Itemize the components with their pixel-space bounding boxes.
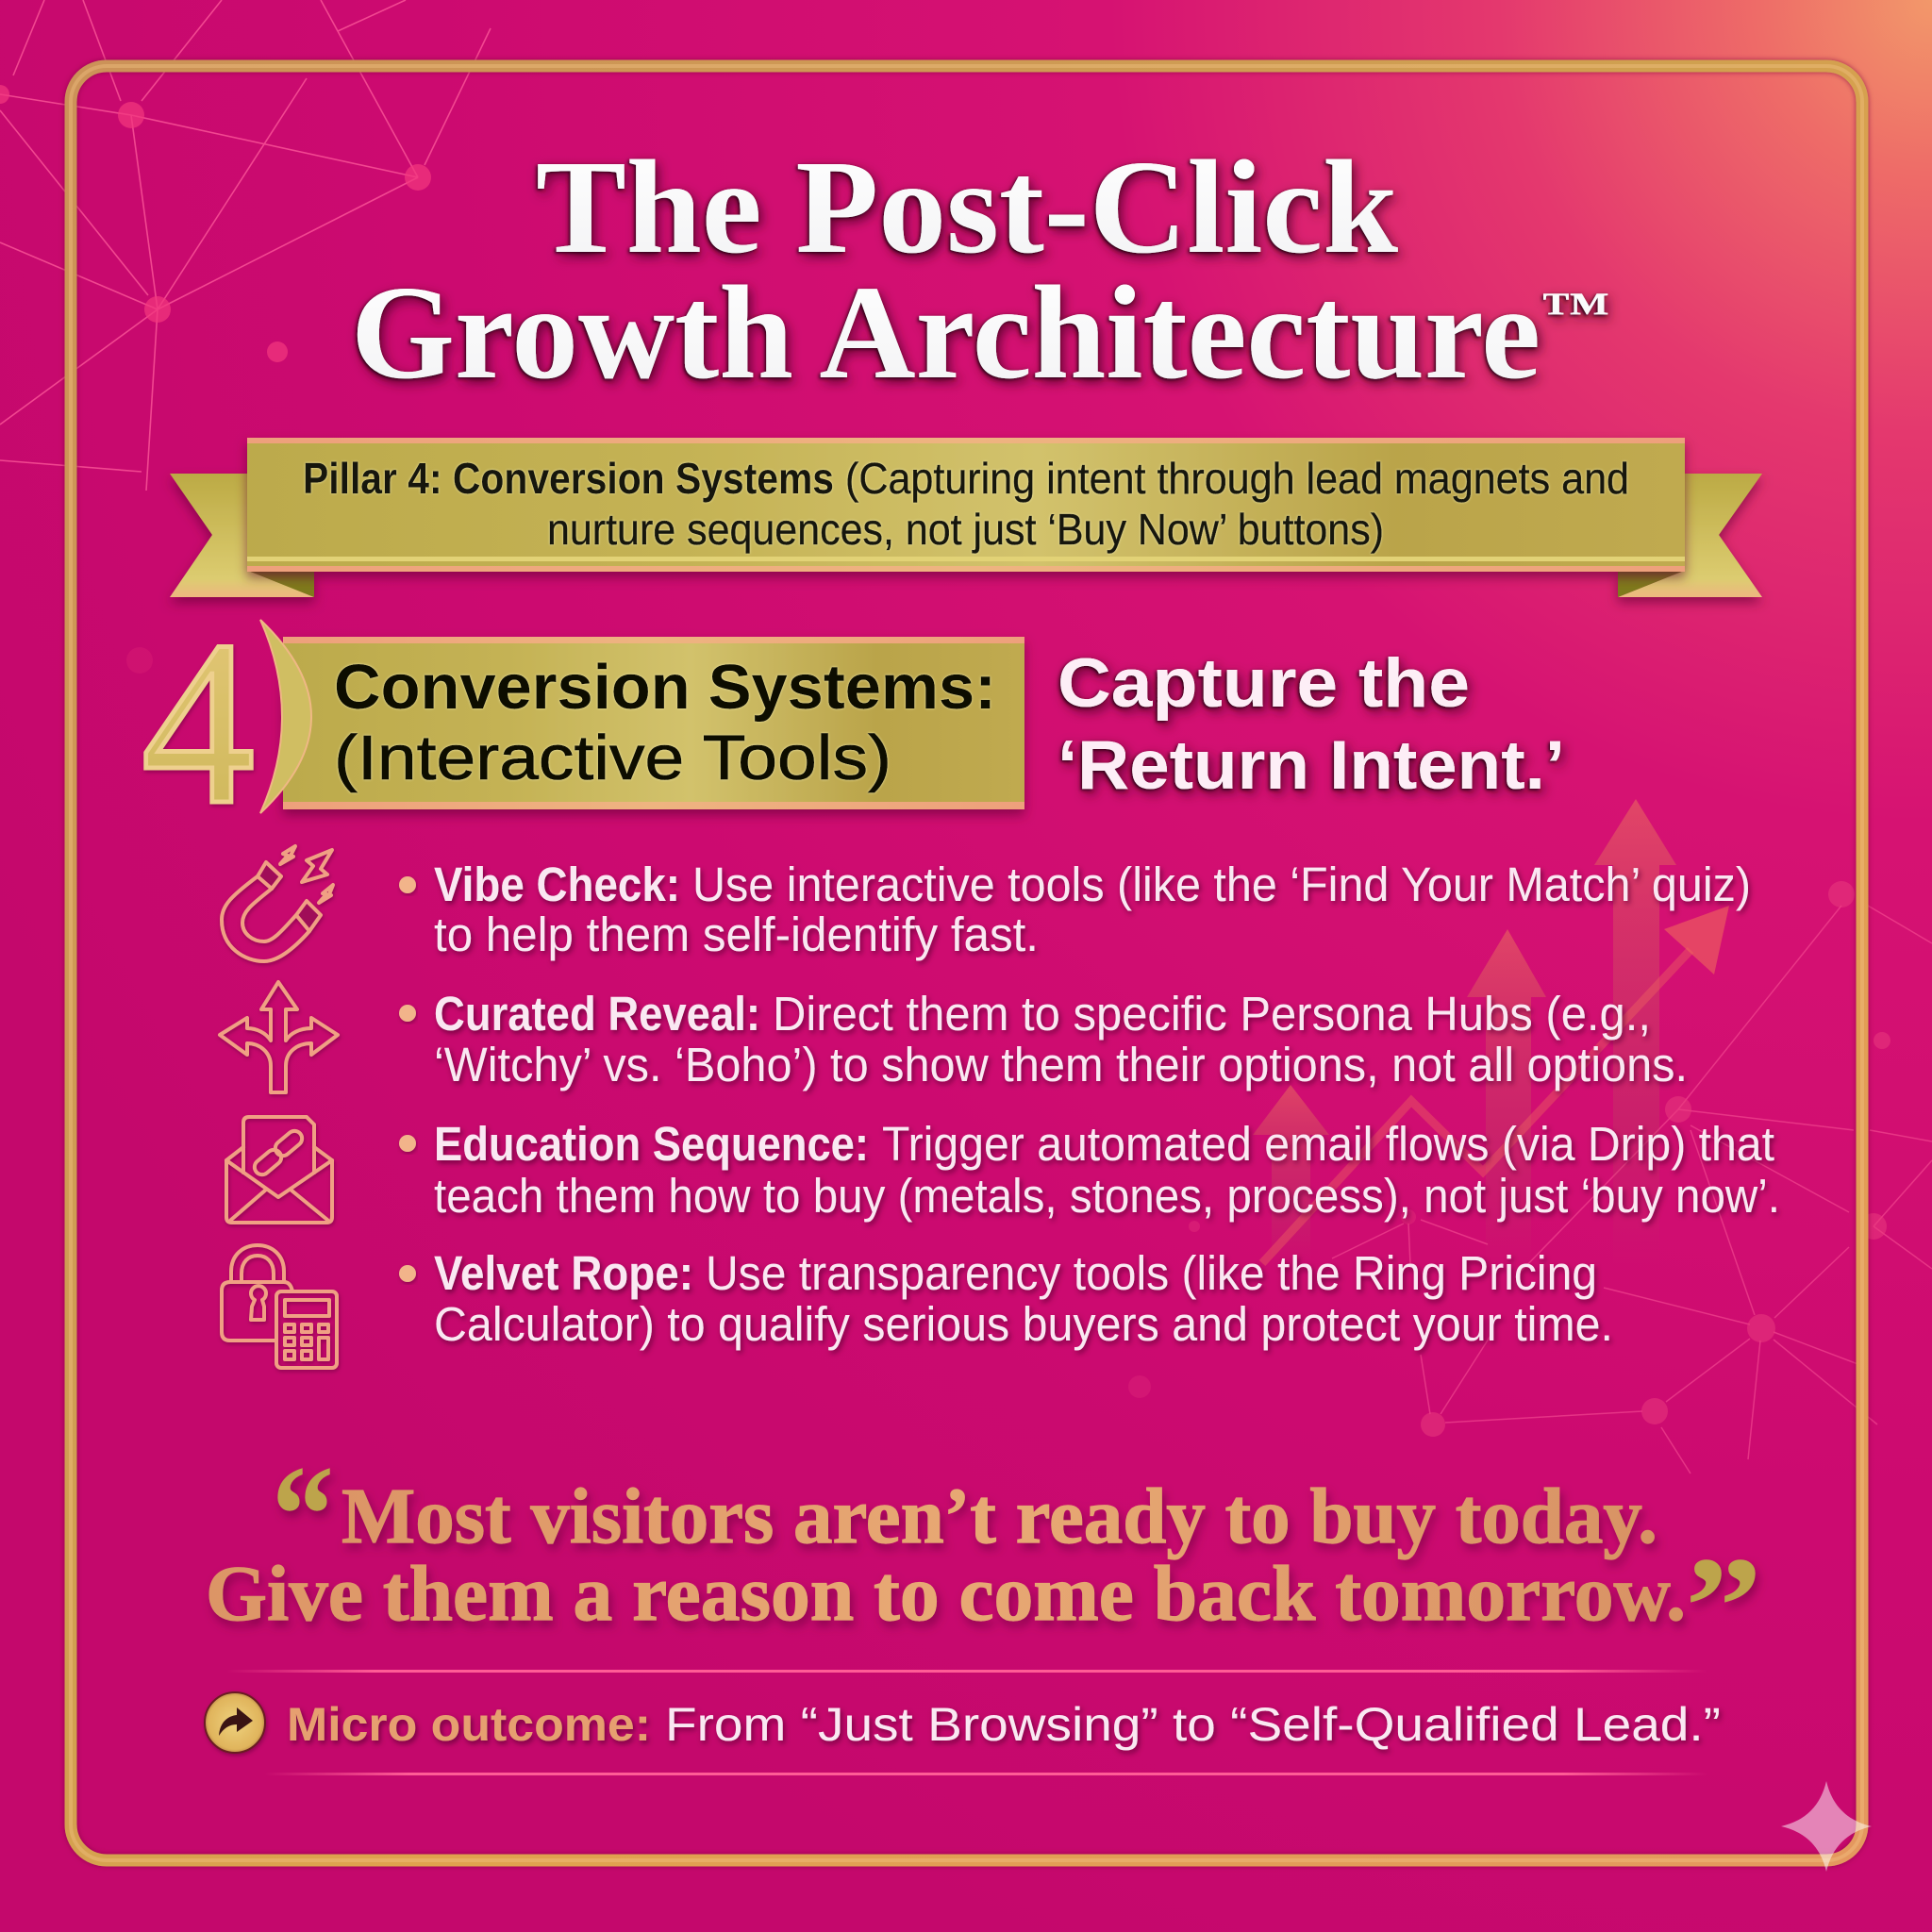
- bullet: Curated Reveal: [399, 987, 1688, 1091]
- divider top: [226, 1670, 1707, 1673]
- bullet: Education Sequence: teach them how to buy (metals, stones, process), not just ‘buy now’.: [434, 1169, 1780, 1223]
- title: [351, 132, 1610, 407]
- ribbon body: [247, 438, 1685, 572]
- divider bottom: [264, 1773, 1707, 1775]
- bullet: Curated Reveal: Direct them to specific Persona Hubs (e.g.,: [773, 987, 1651, 1041]
- bullet: Education Sequence: Trigger automated email flows (via Drip) that: [882, 1117, 1774, 1171]
- bullet: Curated Reveal: Curated Reveal:: [434, 987, 760, 1041]
- micro outcome: [205, 1692, 1721, 1753]
- pull quote: Most visitors aren’t ready to buy today.: [341, 1473, 1657, 1560]
- subheading: Capture the: [1058, 645, 1470, 722]
- title: ™: [1541, 282, 1610, 341]
- icon: email with link: [226, 1117, 332, 1223]
- micro outcome text: From “Just Browsing” to “Self-Qualified Lead.”: [665, 1698, 1721, 1751]
- chart arrows watermark: [1253, 799, 1729, 1264]
- network pattern: top left: [0, 0, 491, 674]
- bullet: Velvet Rope: Calculator) to qualify serious buyers and protect your time.: [434, 1297, 1613, 1351]
- network pattern: lower right: [1128, 881, 1932, 1474]
- badge text: (Interactive Tools): [334, 723, 891, 793]
- pull quote: “: [272, 1437, 334, 1593]
- bullet: Curated Reveal: ‘Witchy’ vs. ‘Boho’) to show them their options, not all options.: [434, 1038, 1688, 1091]
- ribbon text: [303, 454, 1629, 554]
- badge crescent: [260, 620, 311, 813]
- ribbon text: Pillar 4: Conversion Systems: [303, 454, 834, 503]
- micro outcome label: Micro outcome:: [287, 1698, 651, 1751]
- title: Growth Architecture: [351, 258, 1541, 407]
- pull quote: [206, 1437, 1762, 1685]
- badge text: Conversion Systems:: [334, 652, 996, 723]
- icon: diverging arrows: [220, 982, 338, 1092]
- pull quote: ”: [1685, 1528, 1762, 1685]
- title: The Post-Click: [536, 132, 1398, 281]
- subheading: ‘Return Intent.’: [1058, 727, 1565, 804]
- bullet: Education Sequence: Education Sequence:: [434, 1117, 869, 1171]
- bullet: Education Sequence: [399, 1117, 1780, 1223]
- badge text: [334, 652, 996, 793]
- subheading: [1058, 645, 1565, 804]
- pull quote: Give them a reason to come back tomorrow.: [206, 1550, 1686, 1638]
- badge plate: [283, 637, 1024, 809]
- icon: arrow button: [205, 1692, 265, 1753]
- bullet: Velvet Rope: [399, 1246, 1613, 1351]
- bullet: Vibe Check: Vibe Check:: [434, 858, 680, 911]
- bullet: Velvet Rope: Velvet Rope:: [434, 1246, 693, 1300]
- bullet list: [399, 858, 1780, 1351]
- ribbon banner: Pillar 4: [170, 438, 1762, 597]
- bullet: Vibe Check: to help them self-identify fast.: [434, 908, 1039, 961]
- section number 4: 4: [142, 592, 255, 854]
- ribbon text: (Capturing intent through lead magnets and: [845, 454, 1629, 503]
- icon: lock and calculator: [222, 1245, 337, 1368]
- icon: magnet: [222, 846, 333, 961]
- ribbon text: nurture sequences, not just ‘Buy Now’ buttons): [547, 505, 1384, 554]
- section badge: [260, 620, 1024, 813]
- ribbon tails: [170, 474, 1762, 597]
- icon: sparkle: [1781, 1781, 1872, 1872]
- bullet: Velvet Rope: Use transparency tools (like the Ring Pricing: [706, 1246, 1597, 1300]
- bullet: Vibe Check: [399, 858, 1751, 961]
- bullet: Vibe Check: Use interactive tools (like the ‘Find Your Match’ quiz): [692, 858, 1751, 911]
